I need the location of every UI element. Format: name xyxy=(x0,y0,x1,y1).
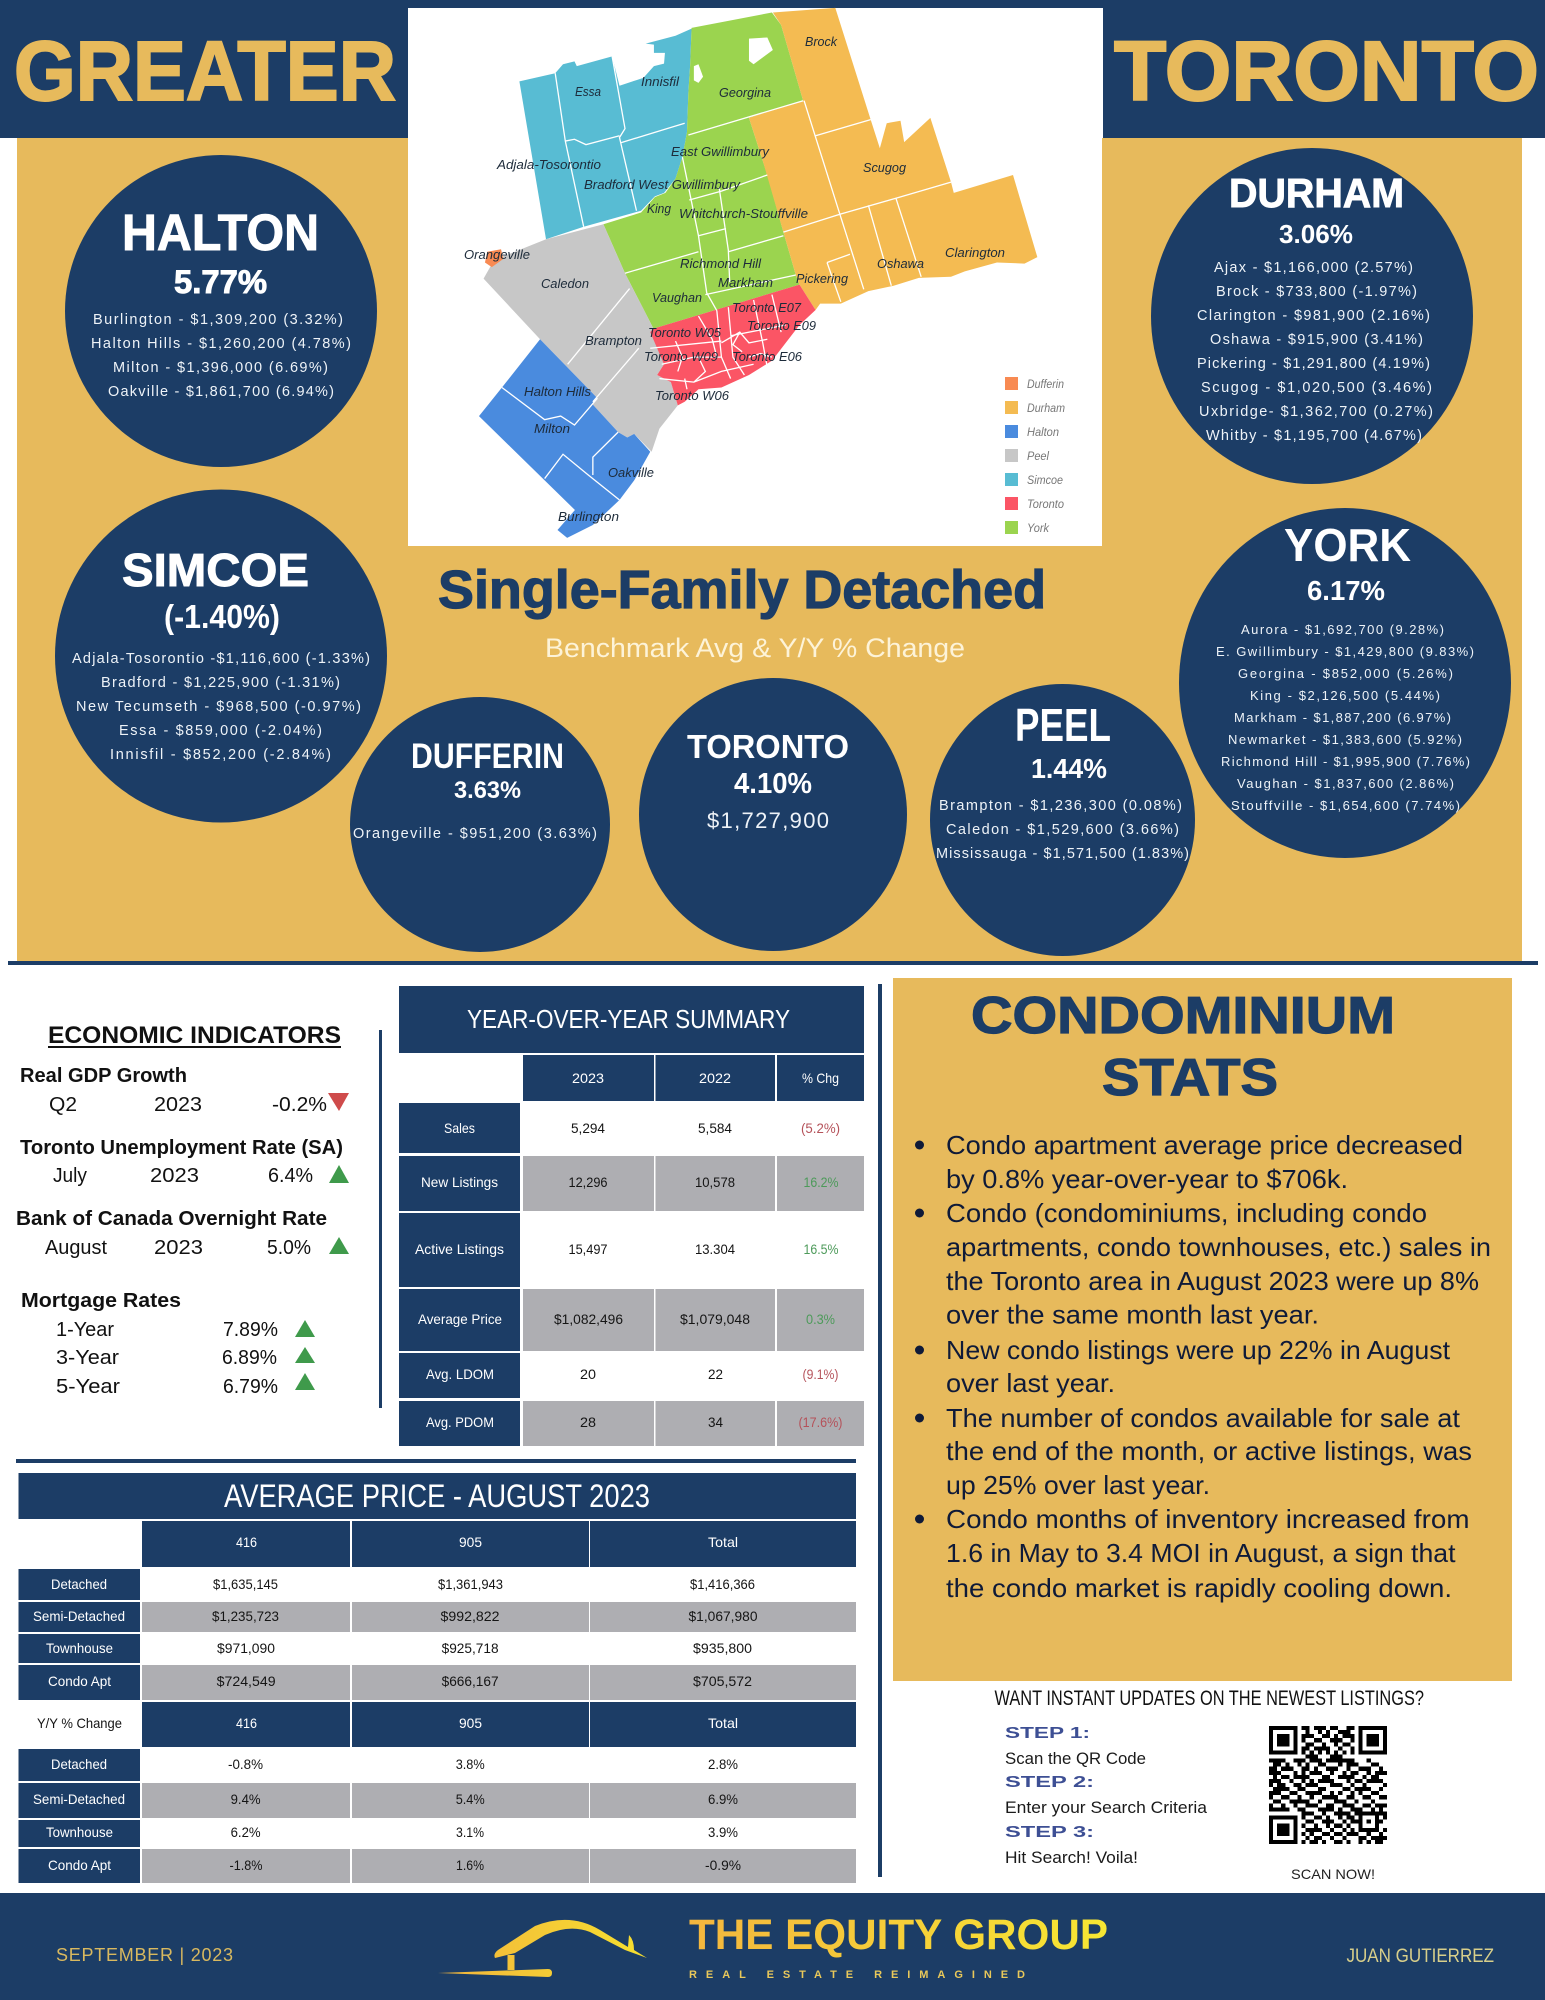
panel: economic indicators xyxy=(16,1022,349,1398)
table: average price August 2023: 905 xyxy=(459,1534,482,1550)
circle: Dufferin: DUFFERIN xyxy=(411,737,564,776)
condo bullet list: the condo market is rapidly cooling down. xyxy=(946,1573,1452,1603)
map labels: Brock xyxy=(805,34,838,49)
table: year-over-year summary: Active Listings xyxy=(415,1241,504,1257)
condo bullet list xyxy=(915,1130,1491,1603)
indicator: real GDP growth: Q2 xyxy=(49,1094,77,1116)
scan now caption: SCAN NOW! xyxy=(1291,1866,1375,1882)
map labels: Richmond Hill xyxy=(680,256,762,271)
table: year-over-year summary: 2023 xyxy=(572,1070,604,1086)
circle: Durham: Brock - $733,800 (-1.97%) xyxy=(1216,284,1417,300)
table: average price August 2023: $666,167 xyxy=(442,1673,499,1689)
table: average price August 2023: 2.8% xyxy=(708,1756,738,1772)
circle: Halton: Milton - $1,396,000 (6.69%) xyxy=(113,360,328,376)
condo bullet list: up 25% over last year. xyxy=(946,1470,1210,1500)
circle: Toronto xyxy=(639,678,907,951)
condo bullet list: The number of condos available for sale at xyxy=(946,1403,1461,1433)
map labels: Vaughan xyxy=(652,290,702,305)
circle: Halton: Oakville - $1,861,700 (6.94%) xyxy=(108,384,334,400)
table: year-over-year summary: 16.2% xyxy=(804,1174,838,1190)
circle: York: Vaughan - $1,837,600 (2.86%) xyxy=(1237,776,1454,791)
circle: Dufferin: 3.63% xyxy=(454,777,521,804)
table: year-over-year summary: Average Price xyxy=(418,1311,502,1327)
map legend: York xyxy=(1027,521,1050,535)
panel: condominium stats xyxy=(893,978,1512,1681)
table: year-over-year summary: 28 xyxy=(580,1414,596,1430)
indicator: real GDP growth xyxy=(20,1065,349,1116)
table: average price August 2023: Condo Apt xyxy=(48,1857,111,1873)
table: average price August 2023: Condo Apt xyxy=(48,1673,111,1689)
map labels: Milton xyxy=(534,421,570,436)
table: average price August 2023: 416 xyxy=(236,1534,257,1550)
circle: Halton: Halton Hills - $1,260,200 (4.78%) xyxy=(91,336,351,352)
table: average price August 2023: Total xyxy=(708,1534,738,1550)
map labels: King xyxy=(647,201,672,216)
circle: York: E. Gwillimbury - $1,429,800 (9.83%) xyxy=(1216,644,1474,659)
callout heading: WANT INSTANT UPDATES ON THE NEWEST LISTINGS? xyxy=(994,1687,1424,1710)
circle: Durham: Ajax - $1,166,000 (2.57%) xyxy=(1214,260,1413,276)
table: year-over-year summary: 2022 xyxy=(699,1070,731,1086)
table: average price August 2023: 3.9% xyxy=(708,1824,738,1840)
steps: Scan the QR Code xyxy=(1005,1749,1146,1768)
table: average price August 2023: $1,416,366 xyxy=(690,1576,755,1592)
table: year-over-year summary: 10,578 xyxy=(695,1174,735,1190)
table: year-over-year summary: Sales xyxy=(444,1120,475,1136)
footer date: SEPTEMBER | 2023 xyxy=(56,1945,233,1965)
table: average price August 2023: $935,800 xyxy=(693,1640,752,1656)
map labels: Toronto E07 xyxy=(732,300,802,315)
indicator: unemployment rate: 6.4% xyxy=(268,1165,313,1187)
header band xyxy=(0,0,1545,138)
circle: Simcoe: (-1.40%) xyxy=(164,598,280,635)
table: average price August 2023: Y/Y % Change xyxy=(37,1715,122,1731)
indicator: unemployment rate: Toronto Unemployment Rate (SA) xyxy=(20,1137,343,1159)
steps: Hit Search! Voila! xyxy=(1005,1848,1138,1867)
circle: Simcoe: Bradford - $1,225,900 (-1.31%) xyxy=(101,675,340,691)
table: average price August 2023: 416 xyxy=(236,1715,257,1731)
map panel xyxy=(408,8,1102,546)
map labels: Essa xyxy=(575,84,601,99)
map labels: Toronto E09 xyxy=(747,318,816,333)
circle: Durham: Scugog - $1,020,500 (3.46%) xyxy=(1201,380,1432,396)
circle: Simcoe: Innisfil - $852,200 (-2.84%) xyxy=(110,747,331,763)
indicator: real GDP growth: Real GDP Growth xyxy=(20,1065,187,1087)
table: average price August 2023: Townhouse xyxy=(46,1640,113,1656)
circle: York xyxy=(1179,508,1511,858)
condo bullet list: Condo apartment average price decreased xyxy=(946,1130,1463,1160)
map labels: Toronto E06 xyxy=(732,349,803,364)
indicator: mortgage rates: 6.89% xyxy=(222,1347,277,1369)
circle: Durham: 3.06% xyxy=(1279,219,1353,249)
icon: logo house xyxy=(438,1920,647,1977)
indicator: mortgage rates: 3-Year xyxy=(56,1347,119,1369)
table: average price August 2023: 9.4% xyxy=(231,1791,261,1807)
heading: Single-Family Detached: Single-Family Detached xyxy=(438,560,1046,620)
table: year-over-year summary: 5,294 xyxy=(571,1120,605,1136)
circle: Durham: Pickering - $1,291,800 (4.19%) xyxy=(1197,356,1430,372)
table: average price August 2023: $971,090 xyxy=(217,1640,275,1656)
map labels: Adjala-Tosorontio xyxy=(496,157,601,172)
indicator: mortgage rates xyxy=(21,1290,315,1398)
map legend: Simcoe xyxy=(1027,473,1063,487)
table: average price August 2023: 905 xyxy=(459,1715,482,1731)
circle: Simcoe: New Tecumseth - $968,500 (-0.97%) xyxy=(76,699,361,715)
condo bullet list: the end of the month, or active listings, was xyxy=(946,1436,1472,1466)
circle: Peel: Brampton - $1,236,300 (0.08%) xyxy=(939,798,1182,814)
table: year-over-year summary: Avg. LDOM xyxy=(426,1366,494,1382)
logo tagline: REAL ESTATE REIMAGINED xyxy=(689,1969,1025,1981)
heading: condominium stats xyxy=(971,987,1395,1107)
map legend: Toronto xyxy=(1027,497,1064,511)
table: year-over-year summary: $1,079,048 xyxy=(680,1311,750,1327)
circle: Peel xyxy=(930,684,1195,956)
indicator: overnight rate: Bank of Canada Overnight Rate xyxy=(16,1208,327,1230)
circle: Halton: HALTON xyxy=(122,204,319,261)
indicator: mortgage rates: Mortgage Rates xyxy=(21,1290,181,1312)
table: average price August 2023 xyxy=(18,1473,856,1883)
map labels: Whitchurch-Stouffville xyxy=(679,206,808,221)
indicator: unemployment rate xyxy=(20,1137,349,1187)
gold market panel xyxy=(17,138,1522,961)
table: year-over-year summary: 15,497 xyxy=(568,1241,608,1257)
circle: Simcoe xyxy=(55,490,387,822)
footer agent name: JUAN GUTIERREZ xyxy=(1346,1946,1494,1967)
table: average price August 2023: $1,361,943 xyxy=(438,1576,503,1592)
circle: York: Markham - $1,887,200 (6.97%) xyxy=(1234,710,1451,725)
circle: Simcoe: Adjala-Tosorontio -$1,116,600 (-1.33%) xyxy=(72,651,370,667)
indicator: mortgage rates: 5-Year xyxy=(56,1376,120,1398)
condo bullet list: over the same month last year. xyxy=(946,1300,1319,1330)
circle: York: Richmond Hill - $1,995,900 (7.76%) xyxy=(1221,754,1470,769)
footer band xyxy=(0,1893,1545,2000)
indicator: overnight rate xyxy=(16,1208,349,1259)
circle: Toronto: TORONTO xyxy=(687,728,849,765)
table: year-over-year summary: 20 xyxy=(580,1366,596,1382)
table: average price August 2023: -1.8% xyxy=(230,1857,262,1873)
indicator: overnight rate: August xyxy=(45,1237,107,1259)
table: average price August 2023: $992,822 xyxy=(440,1608,500,1624)
table: year-over-year summary: New Listings xyxy=(421,1174,498,1190)
map labels: Pickering xyxy=(796,271,849,286)
table: average price August 2023: $1,235,723 xyxy=(212,1608,279,1624)
circle: York: King - $2,126,500 (5.44%) xyxy=(1250,688,1440,703)
table: year-over-year summary xyxy=(399,986,864,1446)
circle: Dufferin xyxy=(350,697,610,952)
table: year-over-year summary: 13.304 xyxy=(695,1241,735,1257)
condo bullet list: Condo months of inventory increased from xyxy=(946,1504,1470,1534)
indicator: mortgage rates: 6.79% xyxy=(223,1376,278,1398)
circle: Durham xyxy=(1151,148,1473,484)
map legend: Halton xyxy=(1027,425,1059,439)
indicator: unemployment rate: 2023 xyxy=(150,1165,199,1187)
table: average price August 2023: $925,718 xyxy=(442,1640,499,1656)
indicator: real GDP growth: 2023 xyxy=(154,1094,202,1116)
table: year-over-year summary: 12,296 xyxy=(568,1174,608,1190)
map labels: Burlington xyxy=(558,509,619,524)
circle: Durham: Clarington - $981,900 (2.16%) xyxy=(1197,308,1430,324)
table: average price August 2023: Detached xyxy=(51,1576,107,1592)
map labels: Orangeville xyxy=(464,247,530,262)
map labels: Toronto W09 xyxy=(644,349,718,364)
circle: Durham: Uxbridge- $1,362,700 (0.27%) xyxy=(1199,404,1433,420)
table: average price August 2023: 3.8% xyxy=(456,1756,485,1772)
table: average price August 2023: Townhouse xyxy=(46,1824,113,1840)
map legend xyxy=(1005,377,1065,535)
circle: York: Aurora - $1,692,700 (9.28%) xyxy=(1241,622,1444,637)
map labels: East Gwillimbury xyxy=(671,144,771,159)
table: year-over-year summary: (5.2%) xyxy=(801,1120,840,1136)
subheading: benchmark: Benchmark Avg & Y/Y % Change xyxy=(545,633,965,663)
table: average price August 2023: 5.4% xyxy=(456,1791,485,1807)
circle: Simcoe: SIMCOE xyxy=(122,544,309,596)
circle: York: YORK xyxy=(1284,519,1411,571)
table: year-over-year summary: 22 xyxy=(708,1366,723,1382)
title: Greater: GREATER xyxy=(14,24,396,118)
logo wordmark: THE EQUITY GROUP xyxy=(689,1911,1108,1959)
steps: Enter your Search Criteria xyxy=(1005,1798,1208,1817)
heading: condominium stats: STATS xyxy=(1102,1049,1278,1107)
table: year-over-year summary: 34 xyxy=(708,1414,723,1430)
map labels: Caledon xyxy=(541,276,589,291)
circle: Peel: Caledon - $1,529,600 (3.66%) xyxy=(946,822,1179,838)
map labels: Halton Hills xyxy=(524,384,592,399)
map boundary lines xyxy=(502,56,951,500)
table: average price August 2023: Total xyxy=(708,1715,738,1731)
circle: Durham: Whitby - $1,195,700 (4.67%) xyxy=(1206,428,1422,444)
map labels: Georgina xyxy=(719,85,771,100)
condo bullet list: over last year. xyxy=(946,1368,1115,1398)
table: average price August 2023: 6.9% xyxy=(708,1791,738,1807)
circle: Halton: 5.77% xyxy=(174,264,267,300)
map labels: Bradford West Gwillimbury xyxy=(584,177,742,192)
circle: York: 6.17% xyxy=(1307,575,1385,606)
map labels: Toronto W06 xyxy=(655,388,730,403)
circle: York: Georgina - $852,000 (5.26%) xyxy=(1238,666,1453,681)
circle: York: Stouffville - $1,654,600 (7.74%) xyxy=(1231,798,1460,813)
table: average price August 2023: 3.1% xyxy=(456,1824,484,1840)
condo bullet list: 1.6 in May to 3.4 MOI in August, a sign that xyxy=(946,1538,1456,1568)
map labels xyxy=(464,34,1005,524)
condo bullet list: apartments, condo townhouses, etc.) sales in xyxy=(946,1232,1491,1262)
table: year-over-year summary: 0.3% xyxy=(806,1311,835,1327)
circle: Toronto: $1,727,900 xyxy=(707,808,829,833)
table: average price August 2023: Detached xyxy=(51,1756,107,1772)
table: average price August 2023: $1,067,980 xyxy=(688,1608,758,1624)
heading: economic indicators: ECONOMIC INDICATORS xyxy=(48,1022,341,1049)
icon: QR code xyxy=(1269,1726,1387,1844)
table: year-over-year summary: (9.1%) xyxy=(802,1366,838,1382)
map legend: Dufferin xyxy=(1027,377,1064,391)
table: year-over-year summary: % Chg xyxy=(802,1070,839,1086)
table: year-over-year summary: Avg. PDOM xyxy=(426,1414,494,1430)
circle: Dufferin: Orangeville - $951,200 (3.63%) xyxy=(353,826,597,842)
condo bullet list: the Toronto area in August 2023 were up 8% xyxy=(946,1266,1479,1296)
circle: York: Newmarket - $1,383,600 (5.92%) xyxy=(1228,732,1462,747)
circle: Peel: PEEL xyxy=(1015,699,1111,751)
table: year-over-year summary: 16.5% xyxy=(804,1241,838,1257)
indicator: real GDP growth: -0.2% xyxy=(272,1094,327,1116)
indicator: overnight rate: 2023 xyxy=(154,1237,203,1259)
circle: Halton: Burlington - $1,309,200 (3.32%) xyxy=(93,312,343,328)
steps: STEP 1: xyxy=(1005,1725,1090,1742)
map labels: Scugog xyxy=(863,160,907,175)
map labels: Markham xyxy=(718,275,773,290)
circle: Durham: DURHAM xyxy=(1229,170,1404,216)
steps xyxy=(1005,1725,1208,1867)
table: average price August 2023: $724,549 xyxy=(217,1673,276,1689)
circle: Simcoe: Essa - $859,000 (-2.04%) xyxy=(119,723,322,739)
table: average price August 2023: 6.2% xyxy=(231,1824,261,1840)
heading: condominium stats: CONDOMINIUM xyxy=(971,987,1395,1045)
table: average price August 2023: Semi-Detached xyxy=(33,1791,125,1807)
steps: STEP 3: xyxy=(1005,1824,1094,1841)
steps: STEP 2: xyxy=(1005,1774,1094,1791)
indicator: mortgage rates: 7.89% xyxy=(223,1319,278,1341)
table: year-over-year summary: 5,584 xyxy=(698,1120,732,1136)
circle: Peel: Mississauga - $1,571,500 (1.83%) xyxy=(936,846,1189,862)
map labels: Clarington xyxy=(945,245,1005,260)
table: average price August 2023: $1,635,145 xyxy=(213,1576,278,1592)
circle: Durham: Oshawa - $915,900 (3.41%) xyxy=(1210,332,1423,348)
table: average price August 2023: -0.8% xyxy=(228,1756,263,1772)
map labels: Oshawa xyxy=(877,256,924,271)
indicator: unemployment rate: July xyxy=(53,1165,87,1187)
table title: YEAR-OVER-YEAR SUMMARY xyxy=(467,1004,790,1034)
circle: Peel: 1.44% xyxy=(1031,753,1107,784)
table: average price August 2023: Semi-Detached xyxy=(33,1608,125,1624)
panel: instant updates xyxy=(994,1687,1424,1882)
table: average price August 2023: $705,572 xyxy=(693,1673,752,1689)
table: average price August 2023: -0.9% xyxy=(705,1857,741,1873)
map regions xyxy=(479,8,1037,538)
map labels: Brampton xyxy=(585,333,642,348)
table title: AVERAGE PRICE - AUGUST 2023 xyxy=(224,1478,650,1514)
map labels: Toronto W05 xyxy=(648,325,722,340)
condo bullet list: New condo listings were up 22% in August xyxy=(946,1335,1451,1365)
table: average price August 2023: 1.6% xyxy=(456,1857,484,1873)
condo bullet list: Condo (condominiums, including condo xyxy=(946,1198,1427,1228)
indicator: mortgage rates: 1-Year xyxy=(56,1319,114,1341)
indicator: overnight rate: 5.0% xyxy=(267,1237,311,1259)
map legend: Durham xyxy=(1027,401,1065,415)
map labels: Oakville xyxy=(608,465,654,480)
circle: Halton xyxy=(65,155,377,467)
condo bullet list: by 0.8% year-over-year to $706k. xyxy=(946,1164,1348,1194)
table: year-over-year summary: (17.6%) xyxy=(798,1414,842,1430)
table title xyxy=(18,1473,856,1519)
table title xyxy=(399,986,864,1053)
table: year-over-year summary: $1,082,496 xyxy=(554,1311,623,1327)
map labels: Innisfil xyxy=(641,74,680,89)
title: Toronto: TORONTO xyxy=(1114,24,1539,118)
circle: Toronto: 4.10% xyxy=(734,768,812,800)
map legend: Peel xyxy=(1027,449,1049,463)
